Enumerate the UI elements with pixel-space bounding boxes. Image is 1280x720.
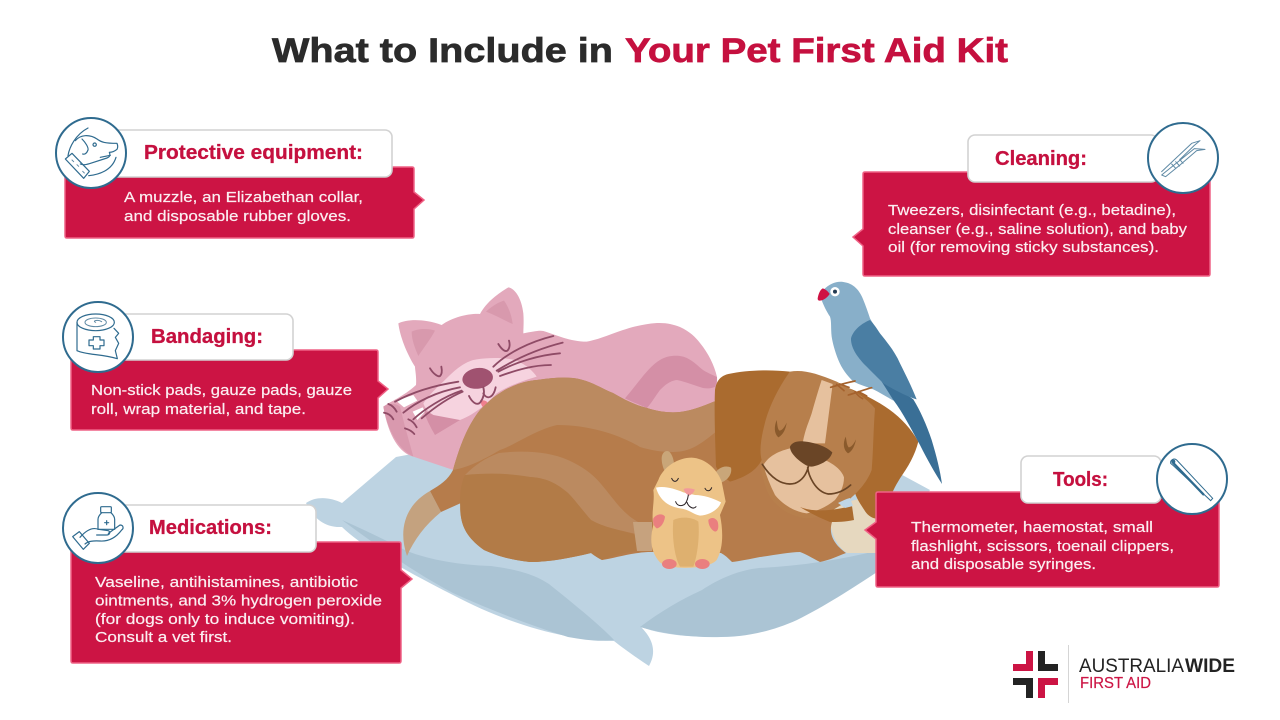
dog: collar — [800, 506, 854, 522]
dog: tail — [403, 491, 441, 556]
cat — [383, 287, 717, 470]
panel: tools — [865, 444, 1227, 587]
cat: tail — [625, 356, 717, 408]
dog — [403, 370, 918, 562]
text: protective equipment: A muzzle, an Elizabethan collar, — [124, 189, 363, 206]
title — [272, 32, 1008, 70]
heading: medications: Medications: — [149, 517, 272, 539]
logo text — [1079, 656, 1235, 692]
logo mark — [1013, 651, 1058, 698]
title: Your Pet First Aid Kit — [625, 32, 1008, 70]
text: protective equipment: and disposable rubber gloves. — [124, 208, 351, 225]
text: bandaging: roll, wrap material, and tape. — [91, 401, 306, 418]
hamster — [651, 451, 731, 569]
text: tools: Thermometer, haemostat, small — [911, 519, 1153, 536]
text: medications: ointments, and 3% hydrogen peroxide — [95, 592, 382, 610]
pillow — [306, 400, 930, 666]
heading: cleaning: Cleaning: — [995, 148, 1087, 170]
panel: medications — [63, 493, 412, 663]
dog: collar strip — [633, 522, 652, 551]
heading: tools: Tools: — [1053, 469, 1108, 491]
dog: body — [430, 378, 846, 562]
logo text: AUSTRALIA — [1079, 656, 1184, 677]
panel: bandaging — [63, 302, 388, 430]
icon: bandage roll — [63, 302, 133, 372]
logo: Australia Wide First Aid — [1013, 645, 1235, 703]
text: tools — [911, 519, 1174, 573]
text: tools: and disposable syringes. — [911, 556, 1096, 573]
text: bandaging — [91, 382, 352, 418]
text: tools: flashlight, scissors, toenail clippers, — [911, 538, 1174, 555]
icon: thermometer — [1157, 444, 1227, 514]
heading: protective equipment: Protective equipment: — [144, 142, 363, 164]
text: medications: Consult a vet first. — [95, 629, 232, 646]
text: medications: (for dogs only to induce vomiting). — [95, 611, 355, 628]
logo text: FIRST AID — [1080, 675, 1151, 692]
panel: cleaning — [853, 123, 1218, 276]
panel: protective equipment — [56, 118, 424, 238]
dog: chest — [830, 495, 880, 553]
icon: dog with Elizabethan collar — [56, 118, 126, 188]
text: protective equipment — [124, 189, 363, 225]
dog: lighter back — [453, 378, 718, 470]
heading: bandaging: Bandaging: — [151, 326, 263, 348]
icon: hand holding bottle — [63, 493, 133, 563]
text: cleaning: Tweezers, disinfectant (e.g., betadine), — [888, 202, 1176, 219]
dog: hind leg — [465, 452, 640, 535]
icon: tweezers — [1148, 123, 1218, 193]
text: medications — [95, 574, 382, 646]
logo text: WIDE — [1185, 656, 1235, 677]
text: cleaning: oil (for removing sticky substances). — [888, 239, 1159, 256]
bird — [818, 282, 942, 484]
title: What to Include in — [272, 32, 613, 70]
text: bandaging: Non-stick pads, gauze pads, gauze — [91, 382, 352, 399]
text: medications: Vaseline, antihistamines, antibiotic — [95, 574, 359, 591]
text: cleaning: cleanser (e.g., saline solution), and baby — [888, 221, 1188, 238]
illustration: sleeping pets on a pillow — [306, 282, 942, 666]
dog: head and ears — [715, 370, 918, 519]
text: cleaning — [888, 202, 1188, 256]
